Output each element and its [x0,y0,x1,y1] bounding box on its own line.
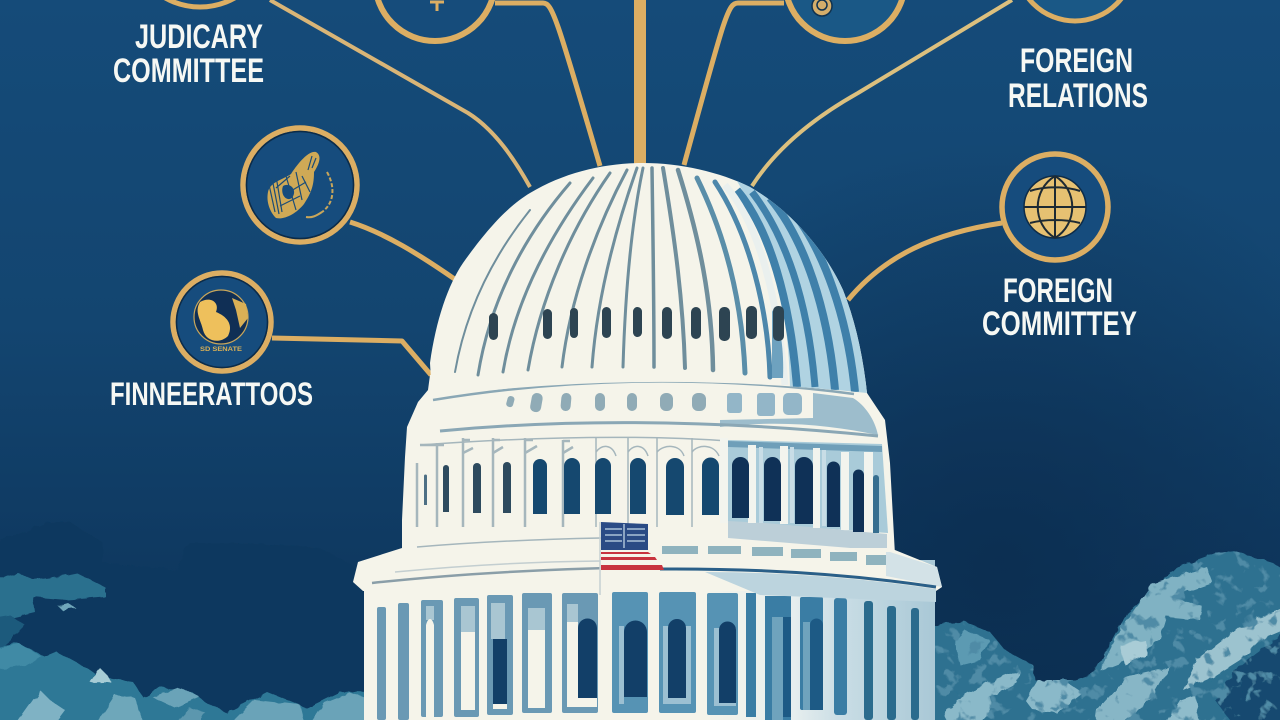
foliage: right [930,552,1280,720]
label: foreign relations: RELATIONS [1008,77,1148,115]
connector: far right [752,0,1012,186]
label: judiciary committee: COMMITTEE [113,52,264,90]
label: foreign relations [1008,42,1148,115]
icon: lower-left globe emblem: SD SENATE [200,347,242,353]
connector: far left [270,0,530,187]
icon: top circle far right [1016,0,1134,21]
connector: upper right [684,3,784,165]
icon: lower-left globe emblem [173,273,271,371]
label: lower-left committee: FINNEERATTOOS [110,376,313,412]
drum with small windows [402,375,895,555]
dome [430,163,870,397]
capitol building [353,163,942,720]
foliage: left [0,522,370,720]
connector: centre [634,0,646,164]
american flag [600,522,664,595]
icon: top-left partial circle [129,0,271,7]
connector: left lower [272,338,431,375]
label: foreign relations: FOREIGN [1020,42,1133,80]
icon: top circle right [785,0,905,41]
connector lines [270,0,1012,375]
label: judiciary committee [113,18,264,90]
label: foreign committee: COMMITTEY [982,305,1137,343]
connector: upper left [495,3,600,166]
main cornice [353,546,942,602]
icon: judiciary emblem [243,128,357,242]
upper colonnade windows [417,437,888,551]
label: judiciary committee: JUDICARY [135,18,263,56]
label: foreign committee: FOREIGN [1003,272,1113,310]
connector: left middle [350,222,456,280]
label: foreign committee [982,272,1137,343]
lower colonnade [364,560,935,720]
icon: top circle left [375,0,495,41]
icon: globe [1002,154,1108,260]
connector: right middle [848,223,1002,300]
